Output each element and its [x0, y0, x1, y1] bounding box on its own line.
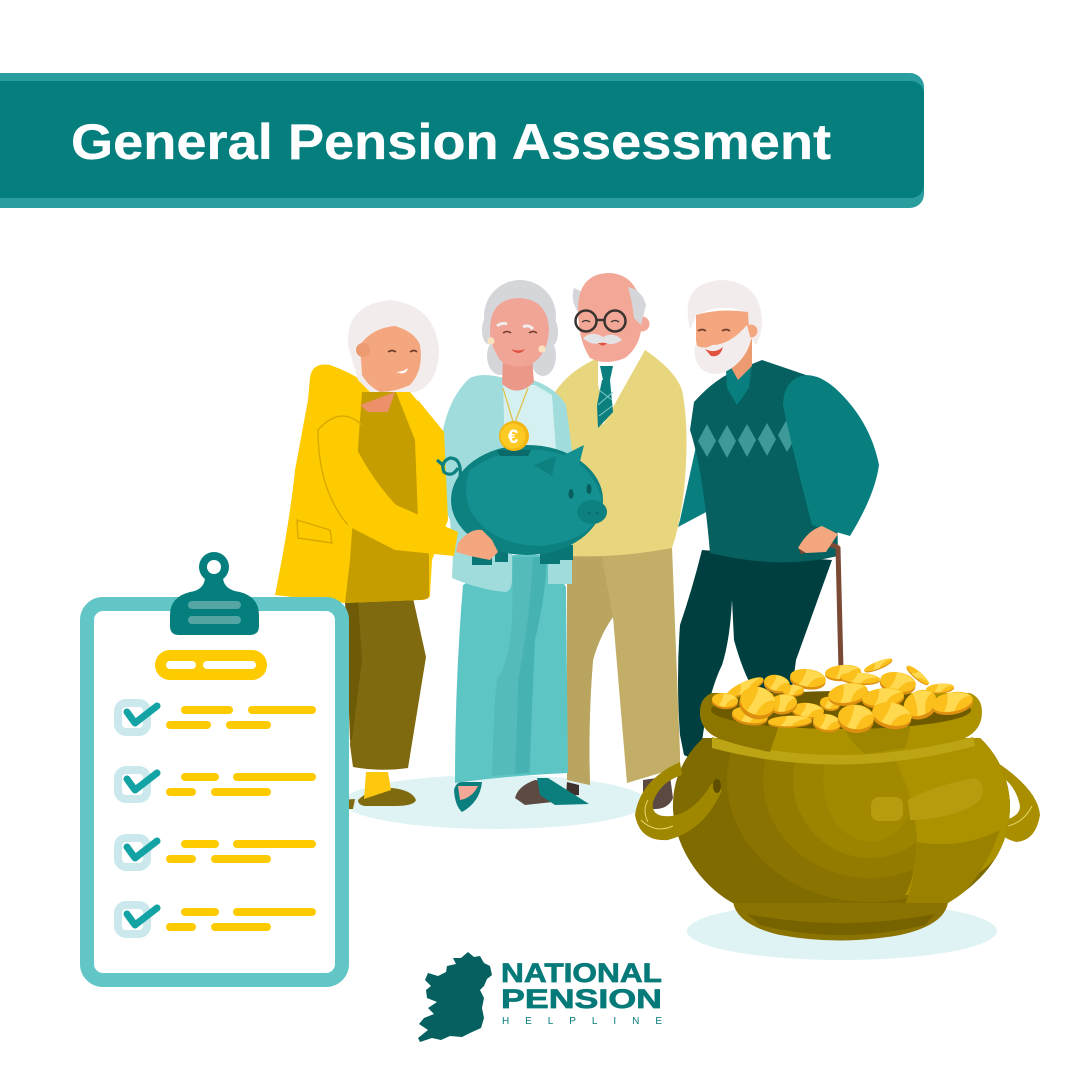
cardigan — [439, 375, 572, 592]
piggy bank — [437, 421, 607, 565]
checklist row 2 — [118, 770, 316, 799]
rim — [712, 737, 975, 765]
body — [672, 738, 1010, 903]
clipboard heading pill — [155, 650, 267, 680]
person: woman in yellow coat — [275, 300, 458, 809]
right handle — [998, 763, 1040, 842]
checklist row 3 — [118, 838, 316, 867]
logo wordmark: HELPLINE — [502, 1016, 662, 1027]
sweater diamonds — [698, 419, 797, 458]
trousers — [567, 547, 680, 785]
person: man with beard and cane — [678, 280, 879, 762]
skirt — [455, 555, 568, 783]
woman shoes — [454, 782, 482, 812]
ground shadow under people — [343, 775, 647, 829]
icon: map of Ireland — [418, 952, 492, 1042]
person: man with glasses — [515, 273, 687, 809]
man shoes — [643, 776, 673, 809]
logo: National Pension Helpline — [418, 952, 662, 1042]
euro coin: € — [508, 427, 519, 448]
logo wordmark: PENSION — [501, 984, 662, 1014]
hand on piggy bank — [456, 530, 498, 560]
shadow under pot — [687, 902, 997, 960]
logo wordmark — [501, 958, 662, 1027]
euro coin — [499, 421, 529, 451]
person: woman in teal cardigan — [439, 280, 589, 812]
gold coins — [711, 656, 975, 734]
checklist row 1 — [118, 703, 316, 732]
left handle — [635, 762, 722, 840]
clipboard — [87, 552, 342, 980]
cane — [800, 545, 841, 670]
cardigan — [555, 350, 687, 556]
clip — [170, 552, 259, 635]
foot — [733, 902, 948, 940]
title banner — [0, 73, 924, 208]
title: General Pension Assessment — [71, 114, 831, 170]
tie — [597, 366, 613, 428]
glasses — [576, 310, 626, 332]
pot of gold — [635, 656, 1040, 940]
checklist row 4 — [118, 905, 316, 934]
logo wordmark: NATIONAL — [501, 958, 662, 988]
